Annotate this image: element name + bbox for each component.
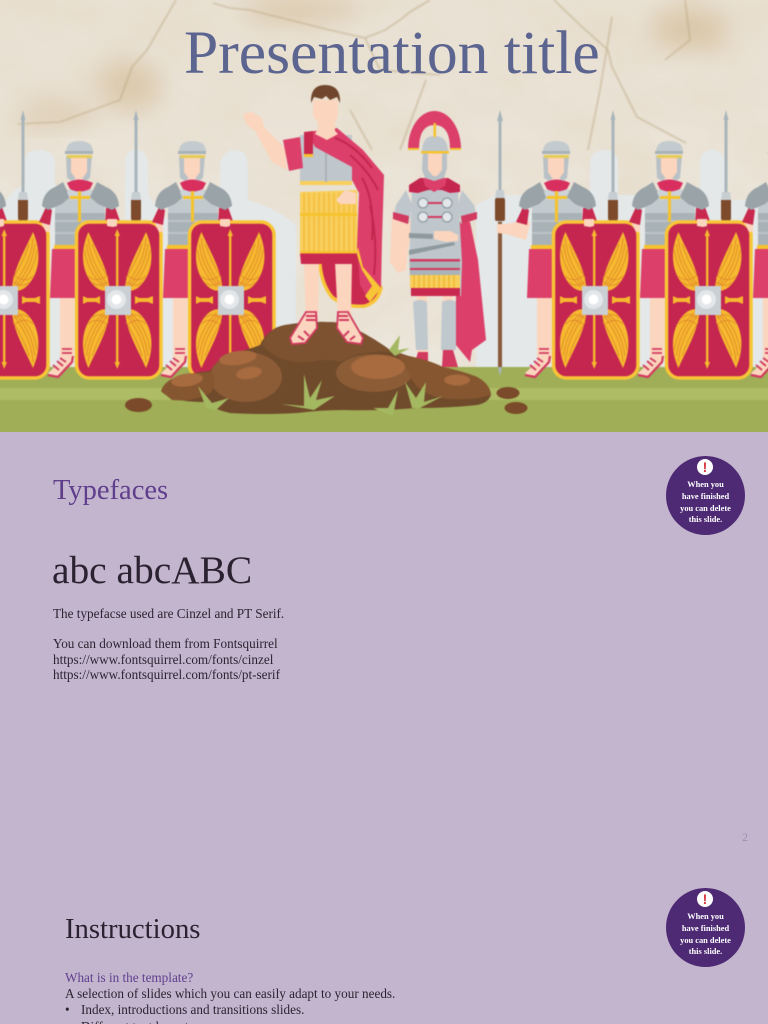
- text block: instructions: [65, 970, 395, 1024]
- text block: instructions: What is in the template?: [65, 970, 193, 985]
- callout badge: delete slide second: this slide.: [689, 947, 722, 956]
- legionaries with shields, right group: [497, 141, 768, 378]
- callout badge: delete slide second: When you: [687, 912, 724, 921]
- callout badge: delete slide: [666, 456, 745, 535]
- icon: exclamation second: !: [703, 891, 707, 907]
- text block: instructions: A selection of slides which you can easily adapt to your needs.: [65, 986, 395, 1001]
- text block: instructions: •: [65, 1002, 70, 1017]
- text block: typeface notes: https://www.fontsquirrel.com/fonts/cinzel: [53, 652, 273, 666]
- marble wall: [0, 0, 768, 438]
- figure: commander: [243, 85, 384, 344]
- title: Presentation title: [184, 19, 600, 87]
- callout badge: delete slide: When you: [687, 480, 724, 489]
- text block: instructions: Index, introductions and transitions slides.: [81, 1002, 304, 1017]
- hero illustration: [0, 0, 768, 432]
- callout badge: delete slide second: [666, 888, 745, 967]
- background crowd silhouettes: [0, 150, 768, 370]
- icon: exclamation: !: [703, 459, 707, 475]
- heading: typefaces: Typefaces: [53, 475, 168, 506]
- text block: typeface notes: https://www.fontsquirrel.com/fonts/pt-serif: [53, 667, 280, 682]
- ground: [0, 367, 768, 438]
- figure: centurion: [390, 111, 486, 367]
- page number: 2: [742, 830, 748, 844]
- spears behind the legionaries: [18, 110, 731, 221]
- callout badge: delete slide: have finished: [682, 492, 729, 501]
- icon: exclamation: [697, 459, 713, 475]
- legionaries with shields, left group: [0, 141, 274, 378]
- callout badge: delete slide: you can delete: [680, 504, 731, 513]
- text block: typeface notes: The typefacse used are Cinzel and PT Serif.: [53, 606, 284, 621]
- text block: typeface notes: [53, 606, 284, 682]
- callout badge: delete slide second: you can delete: [680, 936, 731, 945]
- callout badge: delete slide second: have finished: [682, 924, 729, 933]
- loose stones: [125, 387, 528, 414]
- heading: instructions: Instructions: [65, 913, 200, 945]
- spear held by soldier: [495, 110, 505, 376]
- text block: typeface notes: You can download them from Fontsquirrel: [53, 636, 278, 651]
- icon: exclamation second: [697, 891, 713, 907]
- callout badge: delete slide: this slide.: [689, 515, 722, 524]
- rock mound with grass: [161, 322, 491, 416]
- typeface sample: abc abcABC: [52, 548, 252, 592]
